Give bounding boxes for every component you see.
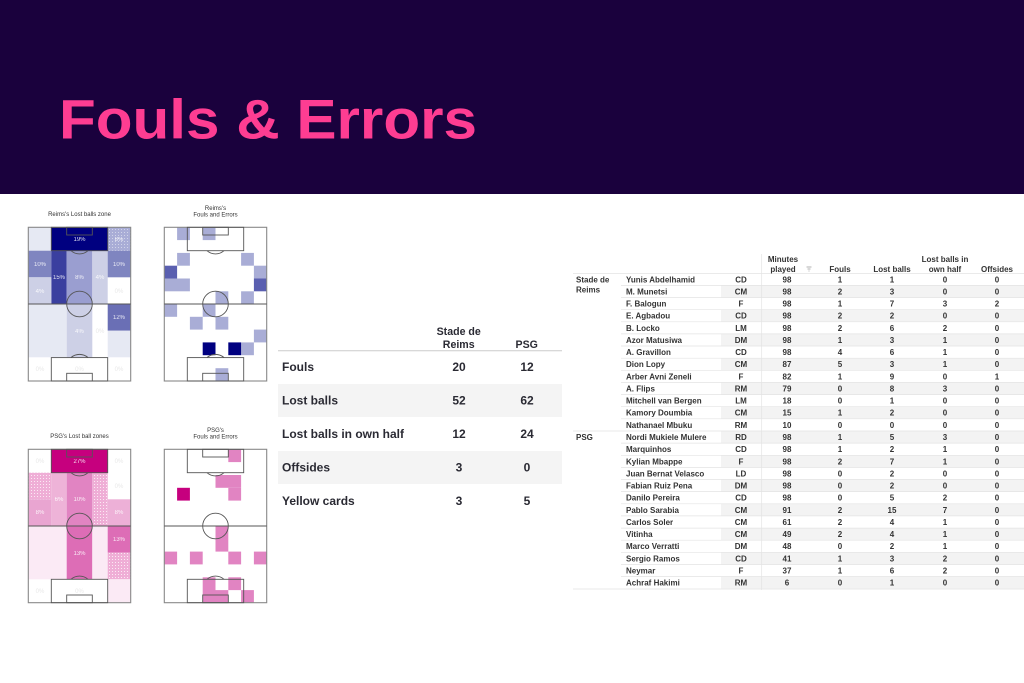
- panel: player statistics table: 1: [838, 566, 843, 575]
- panel: player statistics table: 6: [890, 566, 895, 575]
- panel: player statistics table: 1: [838, 275, 843, 284]
- panel: player statistics table: Lost balls: [873, 265, 911, 274]
- panel: player statistics table: 0: [995, 542, 1000, 551]
- panel: match totals table: 12: [452, 427, 466, 441]
- panel: match totals table: Offsides: [282, 460, 330, 474]
- panel: player statistics table: 0: [943, 287, 948, 296]
- panel: player statistics table: Yunis Abdelhamid: [626, 275, 695, 284]
- panel: player statistics table: Neymar: [626, 566, 655, 575]
- panel: player statistics table: CM: [735, 518, 748, 527]
- panel: player statistics table: CD: [735, 312, 747, 321]
- panel: match totals table: [278, 326, 562, 508]
- panel: match totals table: Lost balls in own half: [282, 427, 405, 441]
- heading: Reims lost balls zone: Reims's Lost balls zone: [48, 212, 112, 218]
- panel: player statistics table: 0: [838, 482, 843, 490]
- panel: player statistics table: CD: [735, 445, 747, 454]
- panel: player statistics table: 0: [995, 384, 1000, 394]
- panel: match totals table: 3: [456, 494, 463, 508]
- panel: player statistics table: 0: [995, 312, 1000, 321]
- panel: player statistics table: 0: [995, 566, 1000, 575]
- panel: Reims fouls and errors grid: [164, 206, 267, 381]
- panel: match totals table: PSG: [516, 339, 538, 351]
- icon: sort indicator: [806, 267, 812, 271]
- panel: player statistics table: 0: [995, 348, 1000, 357]
- panel: player statistics table: 0: [943, 312, 948, 321]
- panel: PSG lost balls heatmap: 13%: [73, 551, 86, 557]
- panel: PSG lost balls heatmap: 0%: [75, 589, 85, 595]
- panel: player statistics table: 0: [995, 579, 1000, 588]
- panel: player statistics table: 1: [943, 348, 948, 357]
- heading: PSG fouls and errors: Fouls and Errors: [193, 435, 238, 441]
- panel: player statistics table: 1: [838, 409, 843, 418]
- panel: PSG lost balls heatmap: 8%: [115, 510, 124, 516]
- panel: PSG lost balls heatmap: 0%: [36, 589, 45, 595]
- panel: player statistics table: 0: [838, 579, 843, 588]
- panel: player statistics table: PSG: [576, 433, 593, 442]
- panel: Reims lost balls heatmap: [28, 212, 131, 381]
- panel: player statistics table: Kamory Doumbia: [626, 409, 693, 418]
- heading: PSG fouls and errors: PSG's: [207, 428, 224, 434]
- panel: player statistics table: Carlos Soler: [626, 518, 673, 527]
- panel: Reims lost balls heatmap: 19%: [73, 237, 86, 243]
- panel: player statistics table: 98: [783, 324, 792, 333]
- panel: player statistics table: Arber Avni Zeneli: [626, 372, 692, 381]
- panel: player statistics table: 0: [943, 409, 948, 418]
- panel: player statistics table: 18: [783, 397, 792, 406]
- panel: player statistics table: played: [770, 265, 796, 274]
- panel: player statistics table: 49: [783, 530, 792, 539]
- panel: player statistics table: LD: [736, 469, 747, 478]
- panel: PSG lost balls heatmap: 8%: [36, 510, 45, 516]
- panel: match totals table: Yellow cards: [282, 494, 355, 508]
- panel: player statistics table: CM: [735, 287, 748, 296]
- panel: player statistics table: 2: [838, 324, 843, 333]
- panel: player statistics table: 0: [838, 397, 843, 406]
- panel: Reims lost balls heatmap: 12%: [113, 315, 126, 321]
- panel: player statistics table: 1: [943, 530, 948, 539]
- panel: player statistics table: 3: [890, 554, 895, 563]
- panel: player statistics table: 91: [783, 506, 792, 515]
- panel: player statistics table: Stade de: [576, 275, 609, 284]
- panel: player statistics table: 98: [783, 457, 792, 466]
- panel: player statistics table: 98: [783, 287, 792, 296]
- panel: player statistics table: 2: [943, 324, 948, 333]
- panel: player statistics table: 0: [995, 506, 1000, 515]
- panel: player statistics table: 2: [838, 312, 843, 321]
- panel: player statistics table: RD: [735, 433, 747, 442]
- panel: player statistics table: 6: [785, 579, 790, 588]
- panel: match totals table: 52: [452, 394, 466, 408]
- panel: player statistics table: CD: [735, 494, 747, 503]
- panel: player statistics table: 4: [890, 518, 895, 527]
- panel: player statistics table: Kylian Mbappe: [626, 457, 683, 466]
- panel: player statistics table: 0: [995, 421, 1000, 430]
- panel: player statistics table: 3: [943, 300, 948, 309]
- panel: player statistics table: 0: [995, 287, 1000, 296]
- panel: PSG lost balls heatmap: 13%: [113, 537, 126, 543]
- panel: player statistics table: 3: [943, 384, 948, 394]
- panel: player statistics table: 2: [943, 566, 948, 575]
- panel: player statistics table: 0: [995, 554, 1000, 563]
- panel: player statistics table: F: [739, 457, 744, 466]
- panel: player statistics table: 98: [783, 445, 792, 454]
- panel: player statistics table: 98: [783, 494, 792, 503]
- panel: player statistics table: 2: [838, 457, 843, 466]
- panel: player statistics table: B. Locko: [626, 324, 660, 333]
- panel: player statistics table: 2: [838, 506, 843, 515]
- panel: Reims lost balls heatmap: 0%: [115, 289, 124, 295]
- panel: player statistics table: 0: [995, 397, 1000, 406]
- panel: player statistics table: 0: [995, 275, 1000, 284]
- panel: Reims lost balls heatmap: 0%: [115, 367, 124, 373]
- panel: player statistics table: 0: [890, 421, 895, 430]
- panel: player statistics table: 37: [783, 566, 792, 575]
- panel: player statistics table: 3: [943, 433, 948, 442]
- panel: player statistics table: 0: [943, 482, 948, 490]
- panel: Reims lost balls heatmap: 4%: [96, 275, 105, 281]
- panel: player statistics table: 0: [995, 530, 1000, 539]
- panel: player statistics table: 10: [783, 421, 792, 430]
- panel: player statistics table: 2: [890, 542, 895, 551]
- panel: player statistics table: 1: [838, 372, 843, 381]
- panel: Reims lost balls heatmap: 8%: [75, 275, 85, 281]
- panel: match totals table: 20: [452, 360, 466, 374]
- panel: player statistics table: E. Agbadou: [626, 312, 670, 321]
- panel: player statistics table: 0: [838, 494, 843, 503]
- panel: player statistics table: F. Balogun: [626, 300, 667, 309]
- panel: player statistics table: 98: [783, 433, 792, 442]
- panel: player statistics table: 1: [943, 336, 948, 345]
- panel: player statistics table: Marco Verratti: [626, 542, 679, 551]
- panel: player statistics table: CM: [735, 409, 748, 418]
- panel: player statistics table: 0: [995, 494, 1000, 503]
- panel: Reims lost balls heatmap: 0%: [96, 329, 105, 335]
- panel: player statistics table: 2: [890, 445, 895, 454]
- panel: player statistics table: Juan Bernat Velasco: [626, 469, 704, 478]
- panel: match totals table: Stade de: [437, 326, 481, 338]
- panel: player statistics table: 1: [943, 542, 948, 551]
- panel: player statistics table: 0: [995, 518, 1000, 527]
- panel: match totals table: 3: [456, 460, 463, 474]
- panel: player statistics table: 98: [783, 348, 792, 357]
- panel: player statistics table: 48: [783, 542, 792, 551]
- panel: player statistics table: 15: [783, 409, 792, 418]
- panel: player statistics table: 41: [783, 554, 792, 563]
- panel: Reims lost balls heatmap: 4%: [75, 329, 85, 335]
- panel: player statistics table: 1: [890, 397, 895, 406]
- panel: player statistics table: 5: [838, 360, 843, 369]
- panel: player statistics table: 1: [943, 518, 948, 527]
- panel: player statistics table: A. Gravillon: [626, 348, 671, 357]
- panel: player statistics table: 2: [838, 287, 843, 296]
- panel: player statistics table: Achraf Hakimi: [626, 579, 680, 588]
- panel: player statistics table: 1: [943, 445, 948, 454]
- panel: player statistics table: 2: [943, 554, 948, 563]
- panel: Reims lost balls heatmap: 0%: [75, 367, 85, 373]
- panel: player statistics table: 3: [890, 287, 895, 296]
- panel: Reims lost balls heatmap: 0%: [36, 367, 45, 373]
- panel: Reims lost balls heatmap: 4%: [36, 289, 45, 295]
- panel: PSG lost balls heatmap: 0%: [115, 484, 124, 490]
- panel: player statistics table: CM: [735, 360, 748, 369]
- panel: player statistics table: Danilo Pereira: [626, 494, 680, 503]
- panel: player statistics table: F: [739, 372, 744, 381]
- panel: player statistics table: 0: [838, 542, 843, 551]
- panel: player statistics table: CD: [735, 275, 747, 284]
- panel: player statistics table: 2: [890, 469, 895, 478]
- panel: player statistics table: 1: [838, 336, 843, 345]
- panel: player statistics table: 4: [838, 348, 843, 357]
- panel: player statistics table: Nathanael Mbuku: [626, 421, 692, 430]
- panel: player statistics table: M. Munetsi: [626, 287, 667, 296]
- panel: player statistics table: LM: [735, 324, 747, 333]
- panel: PSG lost balls heatmap: [28, 434, 131, 603]
- panel: player statistics table: 98: [783, 275, 792, 284]
- panel: Reims lost balls heatmap: 10%: [34, 262, 47, 268]
- panel: player statistics table: 9: [890, 372, 895, 381]
- panel: player statistics table: 1: [838, 445, 843, 454]
- panel: player statistics table: own half: [929, 265, 962, 274]
- panel: player statistics table: 1: [943, 360, 948, 369]
- panel: PSG lost balls heatmap: 0%: [115, 459, 124, 465]
- panel: player statistics table: 1: [943, 457, 948, 466]
- panel: player statistics table: 6: [890, 348, 895, 357]
- panel: player statistics table: F: [739, 566, 744, 575]
- panel: PSG lost balls heatmap: 10%: [73, 497, 86, 503]
- panel: player statistics table: 1: [838, 300, 843, 309]
- panel: match totals table: Reims: [443, 339, 475, 351]
- panel: player statistics table: 87: [783, 360, 792, 369]
- panel: player statistics table: 0: [995, 445, 1000, 454]
- panel: player statistics table: 98: [783, 482, 792, 490]
- panel: player statistics table: Dion Lopy: [626, 360, 666, 369]
- panel: PSG lost balls heatmap: 6%: [55, 497, 64, 503]
- panel: player statistics table: 0: [995, 469, 1000, 478]
- panel: player statistics table: 5: [890, 433, 895, 442]
- panel: player statistics table: 0: [995, 336, 1000, 345]
- panel: player statistics table: 15: [888, 506, 897, 515]
- panel: player statistics table: A. Flips: [626, 384, 655, 394]
- panel: match totals table: 62: [520, 394, 534, 408]
- panel: player statistics table: 0: [943, 372, 948, 381]
- panel: player statistics table: 5: [890, 494, 895, 503]
- panel: player statistics table: Fabian Ruiz Pena: [626, 482, 693, 490]
- panel: player statistics table: Reims: [576, 285, 601, 294]
- panel: player statistics table: 6: [890, 324, 895, 333]
- panel: player statistics table: CD: [735, 554, 747, 563]
- panel: player statistics table: LM: [735, 397, 747, 406]
- panel: player statistics table: 98: [783, 300, 792, 309]
- panel: player statistics table: 2: [995, 300, 1000, 309]
- panel: player statistics table: 2: [943, 494, 948, 503]
- panel: PSG lost balls heatmap: 0%: [36, 459, 45, 465]
- panel: player statistics table: Marquinhos: [626, 445, 672, 454]
- panel: Reims lost balls heatmap: 15%: [53, 275, 66, 281]
- panel: player statistics table: 0: [943, 579, 948, 588]
- panel: player statistics table: 1: [890, 579, 895, 588]
- heading: Reims fouls and errors: Fouls and Errors: [193, 213, 238, 219]
- panel: player statistics table: 2: [890, 482, 895, 490]
- panel: player statistics table: CD: [735, 348, 747, 357]
- panel: player statistics table: Sergio Ramos: [626, 554, 680, 563]
- panel: player statistics table: 0: [995, 482, 1000, 490]
- panel: Reims lost balls heatmap: 8%: [115, 237, 124, 243]
- panel: player statistics table: 0: [995, 409, 1000, 418]
- panel: player statistics table: 7: [890, 457, 895, 466]
- panel: player statistics table: RM: [735, 421, 748, 430]
- panel: player statistics table: 79: [783, 384, 792, 394]
- panel: match totals table: 24: [520, 427, 534, 441]
- panel: player statistics table: DM: [735, 482, 748, 490]
- panel: player statistics table: 1: [995, 372, 1000, 381]
- panel: player statistics table: 0: [995, 433, 1000, 442]
- panel: player statistics table: 2: [890, 312, 895, 321]
- panel: player statistics table: 0: [995, 324, 1000, 333]
- heading: Reims fouls and errors: Reims's: [205, 206, 226, 212]
- title: Fouls & Errors: [59, 87, 477, 150]
- panel: PSG lost balls heatmap: 27%: [73, 459, 86, 465]
- panel: player statistics table: F: [739, 300, 744, 309]
- panel: player statistics table: CM: [735, 530, 748, 539]
- panel: match totals table: Lost balls: [282, 394, 338, 408]
- panel: player statistics table: Nordi Mukiele Mulere: [626, 433, 707, 442]
- panel: player statistics table: 0: [943, 469, 948, 478]
- panel: player statistics table: Fouls: [829, 265, 851, 274]
- panel: player statistics table: [573, 254, 1024, 590]
- panel: match totals table: Fouls: [282, 360, 314, 374]
- panel: player statistics table: 98: [783, 469, 792, 478]
- panel: player statistics table: Mitchell van Bergen: [626, 397, 702, 406]
- panel: player statistics table: 7: [943, 506, 948, 515]
- panel: player statistics table: 3: [890, 336, 895, 345]
- panel: player statistics table: CM: [735, 506, 748, 515]
- panel: player statistics table: Azor Matusiwa: [626, 336, 683, 345]
- panel: Reims lost balls heatmap: 10%: [113, 262, 126, 268]
- panel: player statistics table: 0: [943, 397, 948, 406]
- panel: player statistics table: 1: [890, 275, 895, 284]
- panel: player statistics table: 0: [943, 275, 948, 284]
- panel: player statistics table: 82: [783, 372, 792, 381]
- panel: match totals table: 0: [524, 460, 531, 474]
- panel: player statistics table: 0: [995, 360, 1000, 369]
- panel: player statistics table: Lost balls in: [922, 255, 968, 264]
- panel: player statistics table: Offsides: [981, 265, 1014, 274]
- heading: PSG lost ball zones: PSG's Lost ball zones: [50, 434, 109, 440]
- panel: match totals table: 12: [520, 360, 534, 374]
- title banner: [0, 0, 1024, 194]
- panel: player statistics table: DM: [735, 336, 748, 345]
- panel: player statistics table: 61: [783, 518, 792, 527]
- panel: player statistics table: 0: [838, 469, 843, 478]
- panel: player statistics table: RM: [735, 579, 748, 588]
- panel: player statistics table: Vitinha: [626, 530, 653, 539]
- panel: player statistics table: 0: [943, 421, 948, 430]
- panel: player statistics table: Pablo Sarabia: [626, 506, 679, 515]
- panel: player statistics table: 7: [890, 300, 895, 309]
- panel: player statistics table: Minutes: [768, 255, 798, 264]
- panel: player statistics table: 0: [995, 457, 1000, 466]
- panel: PSG fouls and errors grid: [164, 428, 267, 603]
- panel: player statistics table: 0: [838, 384, 843, 394]
- panel: player statistics table: RM: [735, 384, 748, 394]
- panel: player statistics table: 98: [783, 312, 792, 321]
- panel: player statistics table: 3: [890, 360, 895, 369]
- panel: player statistics table: 98: [783, 336, 792, 345]
- panel: player statistics table: 1: [838, 554, 843, 563]
- panel: match totals table: 5: [524, 494, 531, 508]
- panel: player statistics table: DM: [735, 542, 748, 551]
- panel: player statistics table: 2: [838, 518, 843, 527]
- panel: player statistics table: 2: [890, 409, 895, 418]
- panel: player statistics table: 8: [890, 384, 895, 394]
- panel: player statistics table: 0: [838, 421, 843, 430]
- panel: player statistics table: 1: [838, 433, 843, 442]
- panel: player statistics table: 4: [890, 530, 895, 539]
- panel: player statistics table: 2: [838, 530, 843, 539]
